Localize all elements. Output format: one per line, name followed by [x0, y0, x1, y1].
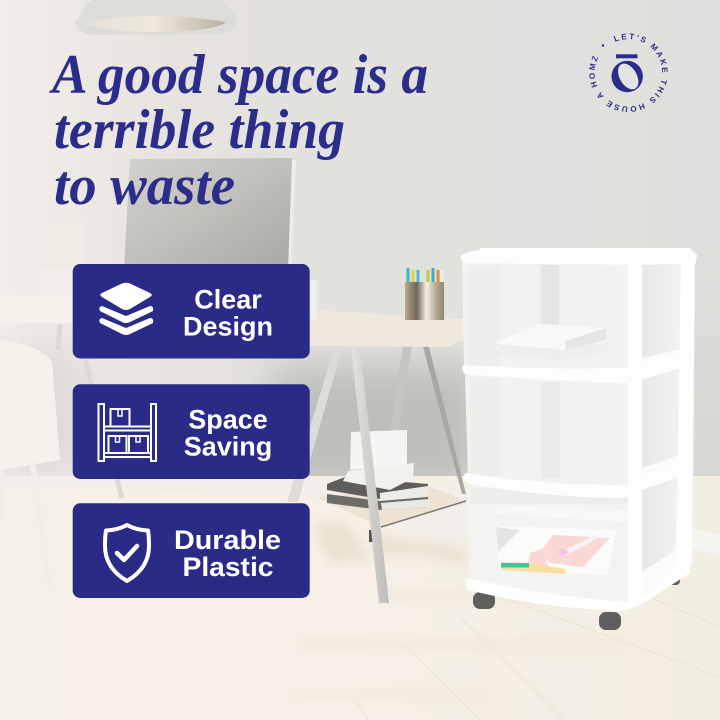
- icon: shelving with boxes: [98, 404, 156, 461]
- desk front leg: [351, 347, 389, 603]
- panel: Clear Design: Design: [183, 312, 273, 342]
- title: terrible thing: [54, 99, 345, 161]
- papers: [497, 324, 610, 360]
- drawer cutout: [496, 526, 616, 575]
- monitor: [124, 158, 296, 270]
- lid: [460, 248, 697, 265]
- icon: layers: [99, 283, 153, 335]
- panel: Space Saving: [73, 384, 310, 479]
- desk: [287, 280, 467, 542]
- panel: Durable Plastic: Durable: [174, 525, 281, 555]
- panel: Space Saving: Space: [188, 404, 268, 434]
- panel: Durable Plastic: [73, 503, 310, 598]
- panel: Clear Design: [73, 264, 310, 358]
- panel: Durable Plastic: Plastic: [182, 552, 274, 582]
- panel: Clear Design: Clear: [194, 284, 262, 314]
- icon: shield with check: [105, 525, 149, 581]
- dividers: [462, 350, 692, 383]
- title: A good space is a: [49, 44, 428, 106]
- title: [49, 44, 428, 217]
- bottom tray: [466, 560, 690, 611]
- notebooks and pens: [501, 535, 610, 574]
- left plant and box: [38, 222, 84, 297]
- front panels: [462, 260, 632, 372]
- drawer unit: [460, 248, 697, 630]
- lamp: [75, 0, 237, 35]
- pen cup: [405, 268, 444, 320]
- panel: Space Saving: Saving: [184, 432, 272, 462]
- left desk and chair: [0, 295, 122, 590]
- logo: circular badge: LET'S MAKE THIS HOUSE A HOMZ: [589, 33, 668, 112]
- title: to waste: [54, 155, 235, 217]
- corner posts: [628, 263, 642, 610]
- books and pot: [327, 430, 429, 510]
- side panels: [640, 256, 695, 604]
- wheels: [473, 575, 680, 630]
